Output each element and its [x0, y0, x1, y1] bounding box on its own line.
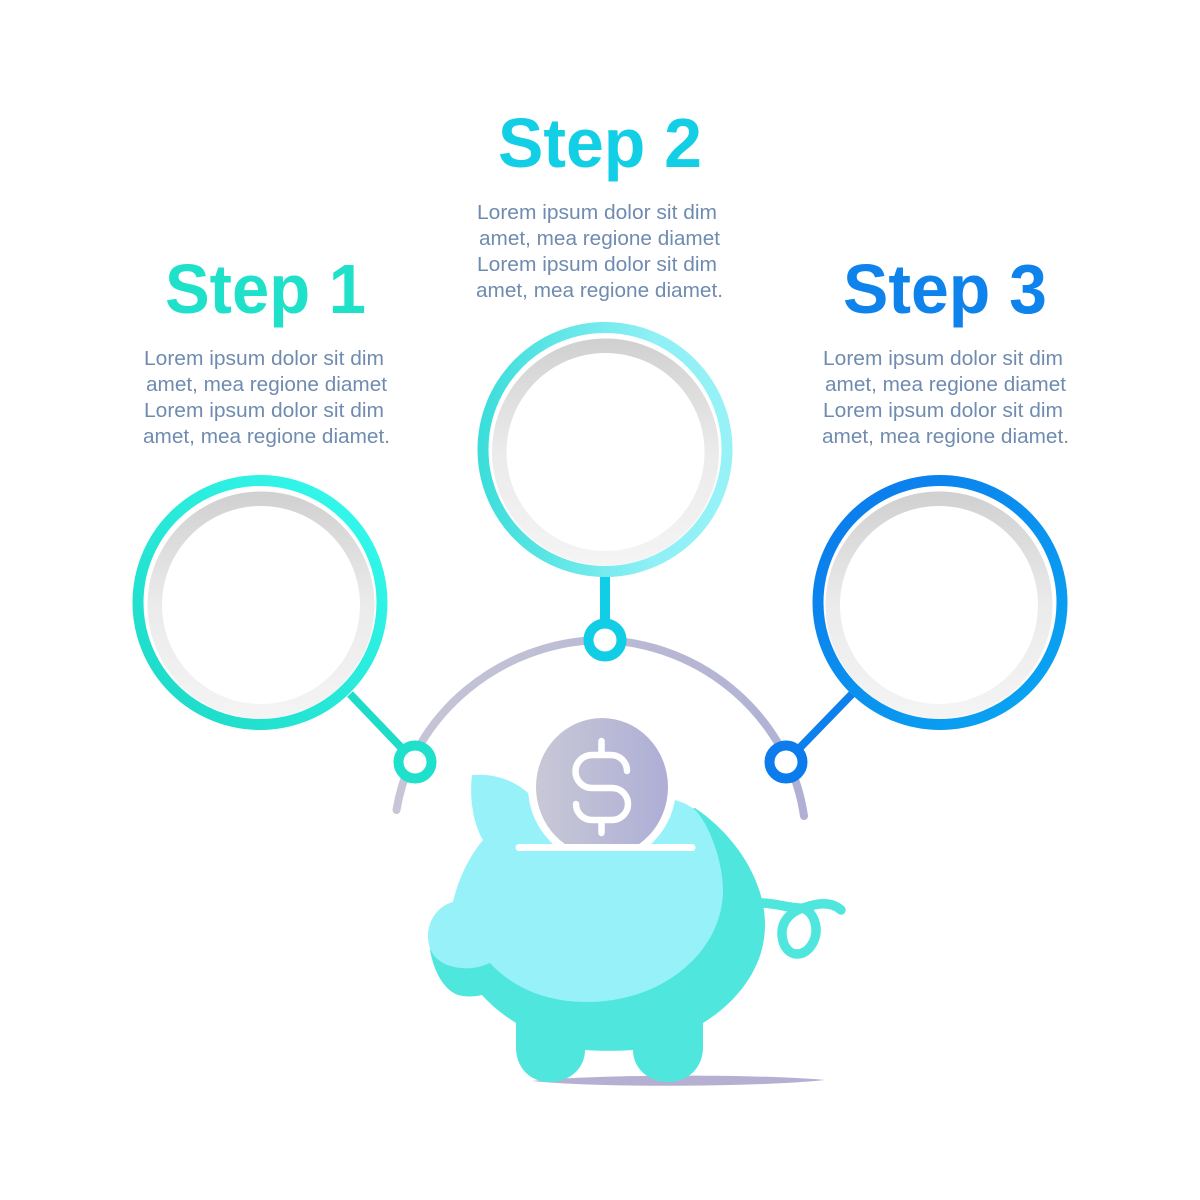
heading: step 3: Step 3 — [843, 250, 1047, 328]
panel: step 3 — [770, 250, 1069, 778]
text block: step 2: amet, mea regione diamet — [479, 228, 720, 250]
text block: step 3: amet, mea regione diamet. — [822, 426, 1069, 448]
node: step 1 — [398, 746, 432, 778]
slot outline — [528, 793, 675, 844]
coin — [536, 718, 668, 856]
text block: step 2 — [476, 202, 723, 302]
text block: step 1: Lorem ipsum dolor sit dim — [144, 348, 384, 370]
shadow — [532, 1076, 825, 1086]
ring: step 2 — [483, 328, 727, 572]
slot — [519, 844, 692, 851]
heading: step 2: Step 2 — [498, 104, 702, 182]
text block: step 2: Lorem ipsum dolor sit dim — [477, 202, 717, 224]
text block: step 2: Lorem ipsum dolor sit dim — [477, 254, 717, 276]
ring: step 1 — [138, 480, 382, 724]
text block: step 1: amet, mea regione diamet — [146, 374, 387, 396]
text block: step 1: Lorem ipsum dolor sit dim — [144, 400, 384, 422]
icon: dollar sign — [576, 741, 628, 833]
connector: step 2 — [600, 575, 610, 625]
connector: step 3 — [786, 694, 852, 762]
node: step 3 — [770, 746, 802, 778]
body light — [428, 775, 723, 1002]
connector: step 1 — [350, 694, 415, 762]
ring: step 3 — [818, 480, 1062, 724]
text block: step 3: Lorem ipsum dolor sit dim — [823, 348, 1063, 370]
tail — [763, 903, 841, 954]
text block: step 2: amet, mea regione diamet. — [476, 280, 723, 302]
heading: step 1: Step 1 — [165, 250, 366, 328]
text block: step 3: amet, mea regione diamet — [825, 374, 1066, 396]
text block: step 3 — [822, 348, 1069, 448]
node: step 2 — [588, 624, 622, 656]
text block: step 1 — [143, 348, 390, 448]
arc — [396, 640, 804, 816]
body dark — [430, 808, 765, 1082]
icon: piggy bank — [428, 711, 841, 1086]
panel: step 1 — [138, 250, 432, 778]
text block: step 1: amet, mea regione diamet. — [143, 426, 390, 448]
text block: step 3: Lorem ipsum dolor sit dim — [823, 400, 1063, 422]
panel: step 2 — [476, 104, 727, 656]
